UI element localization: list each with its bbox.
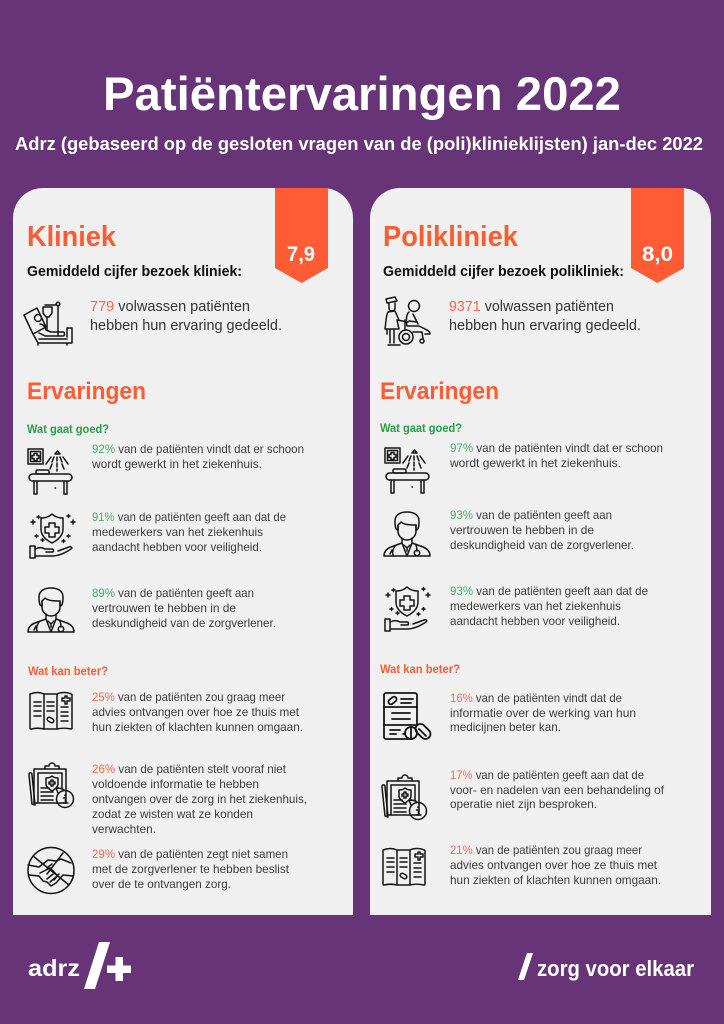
score ribbon: polikliniek 8,0: 8,0 xyxy=(642,243,673,266)
text: 93% safety: 93% van de patiënten geeft aan dat de xyxy=(450,584,648,598)
patients shared text: hebben hun ervaring gedeeld. xyxy=(449,317,641,334)
text: 16% medicine: 16% van de patiënten vindt dat de xyxy=(450,691,622,705)
icon: clipboard with info xyxy=(29,763,74,808)
icon: shield on hand xyxy=(30,514,75,558)
text: 91% safety: 91% van de patiënten geeft aan dat de xyxy=(92,510,286,524)
text: 93% trust: vertrouwen te hebben in de xyxy=(450,523,594,537)
text: 26% information: verwachten. xyxy=(92,822,156,836)
text: 91% safety xyxy=(92,510,286,554)
text: 91% safety: aandacht hebben voor veiligheid. xyxy=(92,540,262,554)
text: 89% trust: 89% van de patiënten geeft aan xyxy=(92,586,254,600)
text: 29% decisions: 29% van de patiënten zegt niet samen xyxy=(92,847,288,861)
text: 16% medicine: informatie over de werking van hun xyxy=(450,706,636,720)
text: 89% trust: vertrouwen te hebben in de xyxy=(92,601,236,615)
heading: polikliniek: Polikliniek xyxy=(383,221,519,253)
subheading: wat kan beter: Wat kan beter? xyxy=(380,662,460,676)
text: 17% pros and cons: voor- en nadelen van een behandeling of xyxy=(450,783,665,797)
text: 92% clean: 92% van de patiënten vindt dat er schoon xyxy=(92,442,304,456)
text: 25% advice: hun ziekten of klachten kunnen omgaan. xyxy=(92,720,303,734)
text: 21% advice: 21% van de patiënten zou graag meer xyxy=(450,843,642,857)
score ribbon: kliniek 7,9 xyxy=(275,188,328,283)
text: 17% pros and cons: 17% van de patiënten geeft aan dat de xyxy=(450,768,644,782)
panel background: polikliniek xyxy=(370,188,711,915)
subtitle: Adrz (gebaseerd op de gesloten vragen van de (poli)kliniekIijsten) jan-dec 2022 xyxy=(15,134,703,154)
text: 93% safety: medewerkers van het ziekenhuis xyxy=(450,599,621,613)
text: 25% advice xyxy=(92,690,303,734)
subheading: wat gaat goed: Wat gaat goed? xyxy=(27,422,109,436)
text: 93% trust xyxy=(450,508,634,552)
icon: leaflet xyxy=(30,692,72,729)
text: 26% information xyxy=(92,762,307,836)
text: 97% clean: 97% van de patiënten vindt dat er schoon xyxy=(450,441,663,455)
text: 29% decisions: met de zorgverlener te hebben beslist xyxy=(92,862,290,876)
icon: clipboard with info xyxy=(382,775,426,820)
text: 25% advice: advies ontvangen over hoe ze thuis met xyxy=(92,705,300,719)
text: 17% pros and cons: operatie niet zijn besproken. xyxy=(450,797,597,811)
icon: clean table xyxy=(385,448,429,493)
icon: doctor xyxy=(28,588,74,632)
text: 21% advice: advies ontvangen over hoe ze thuis met xyxy=(450,858,658,872)
text: 97% clean: wordt gewerkt in het ziekenhuis. xyxy=(449,456,621,470)
score ribbon: polikliniek 8,0 xyxy=(631,188,684,283)
panel: polikliniek xyxy=(370,188,711,915)
text: 97% clean xyxy=(449,441,663,470)
text: 91% safety: medewerkers van het ziekenhuis xyxy=(92,525,263,539)
text: 89% trust: deskundigheid van de zorgverlener. xyxy=(92,616,276,630)
text: 89% trust xyxy=(92,586,276,630)
logo: adrz: adrz xyxy=(28,955,80,981)
patients shared text xyxy=(90,298,282,334)
subheading: wat gaat goed: Wat gaat goed? xyxy=(380,421,462,435)
icon: clean table xyxy=(28,449,72,494)
subheading: wat kan beter: Wat kan beter? xyxy=(28,664,108,678)
title: Patiëntervaringen 2022 xyxy=(103,67,621,120)
text: 26% information: zodat ze wisten wat ze konden xyxy=(92,807,253,821)
text: 25% advice: 25% van de patiënten zou graag meer xyxy=(92,690,285,704)
text: 29% decisions: over de te ontvangen zorg. xyxy=(92,877,231,891)
text: 16% medicine: medicijnen beter kan. xyxy=(450,720,561,734)
text: 93% trust: deskundigheid van de zorgverlener. xyxy=(450,538,634,552)
icon: medicine document xyxy=(384,693,433,741)
text: 93% trust: 93% van de patiënten geeft aan xyxy=(450,508,612,522)
patients shared text: hebben hun ervaring gedeeld. xyxy=(90,317,282,334)
text: 26% information: 26% van de patiënten stelt vooraf niet xyxy=(92,762,287,776)
logo: adrz xyxy=(28,942,131,989)
patients shared text xyxy=(449,298,641,334)
icon: no handshake xyxy=(28,848,74,894)
text: 21% advice: hun ziekten of klachten kunnen omgaan. xyxy=(450,873,661,887)
tagline: zorg voor elkaar: zorg voor elkaar xyxy=(537,956,694,981)
icon: leaflet xyxy=(383,848,425,885)
text: 93% safety: aandacht hebben voor veiligheid. xyxy=(450,614,620,628)
patients shared text: 779 volwassen patiënten xyxy=(90,298,250,315)
text: 29% decisions xyxy=(92,847,290,891)
icon: nurse with wheelchair xyxy=(385,297,430,345)
icon: doctor xyxy=(384,512,430,556)
panel background: kliniek xyxy=(13,188,353,915)
text: 93% safety xyxy=(450,584,648,628)
heading: kliniek: Kliniek xyxy=(27,221,117,253)
text: 26% information: voldoende informatie te hebben xyxy=(92,777,259,791)
patients shared text: 9371 volwassen patiënten xyxy=(449,298,614,315)
heading: ervaringen: Ervaringen xyxy=(380,378,499,405)
heading: ervaringen: Ervaringen xyxy=(27,378,146,405)
icon: patient in reclining bed xyxy=(24,302,72,345)
text: 92% clean: wordt gewerkt in het ziekenhuis. xyxy=(91,457,262,471)
text: 92% clean xyxy=(91,442,304,471)
panel: kliniek xyxy=(13,188,353,915)
icon: shield on hand xyxy=(385,587,430,631)
text: 26% information: ontvangen over de zorg in het ziekenhuis, xyxy=(92,792,307,806)
text: 17% pros and cons xyxy=(450,768,665,811)
average score label: Gemiddeld cijfer bezoek polikliniek: xyxy=(383,263,624,280)
text: 16% medicine xyxy=(450,691,636,734)
score ribbon: kliniek 7,9: 7,9 xyxy=(287,243,315,266)
text: 21% advice xyxy=(450,843,661,887)
average score label: Gemiddeld cijfer bezoek kliniek: xyxy=(27,263,242,280)
